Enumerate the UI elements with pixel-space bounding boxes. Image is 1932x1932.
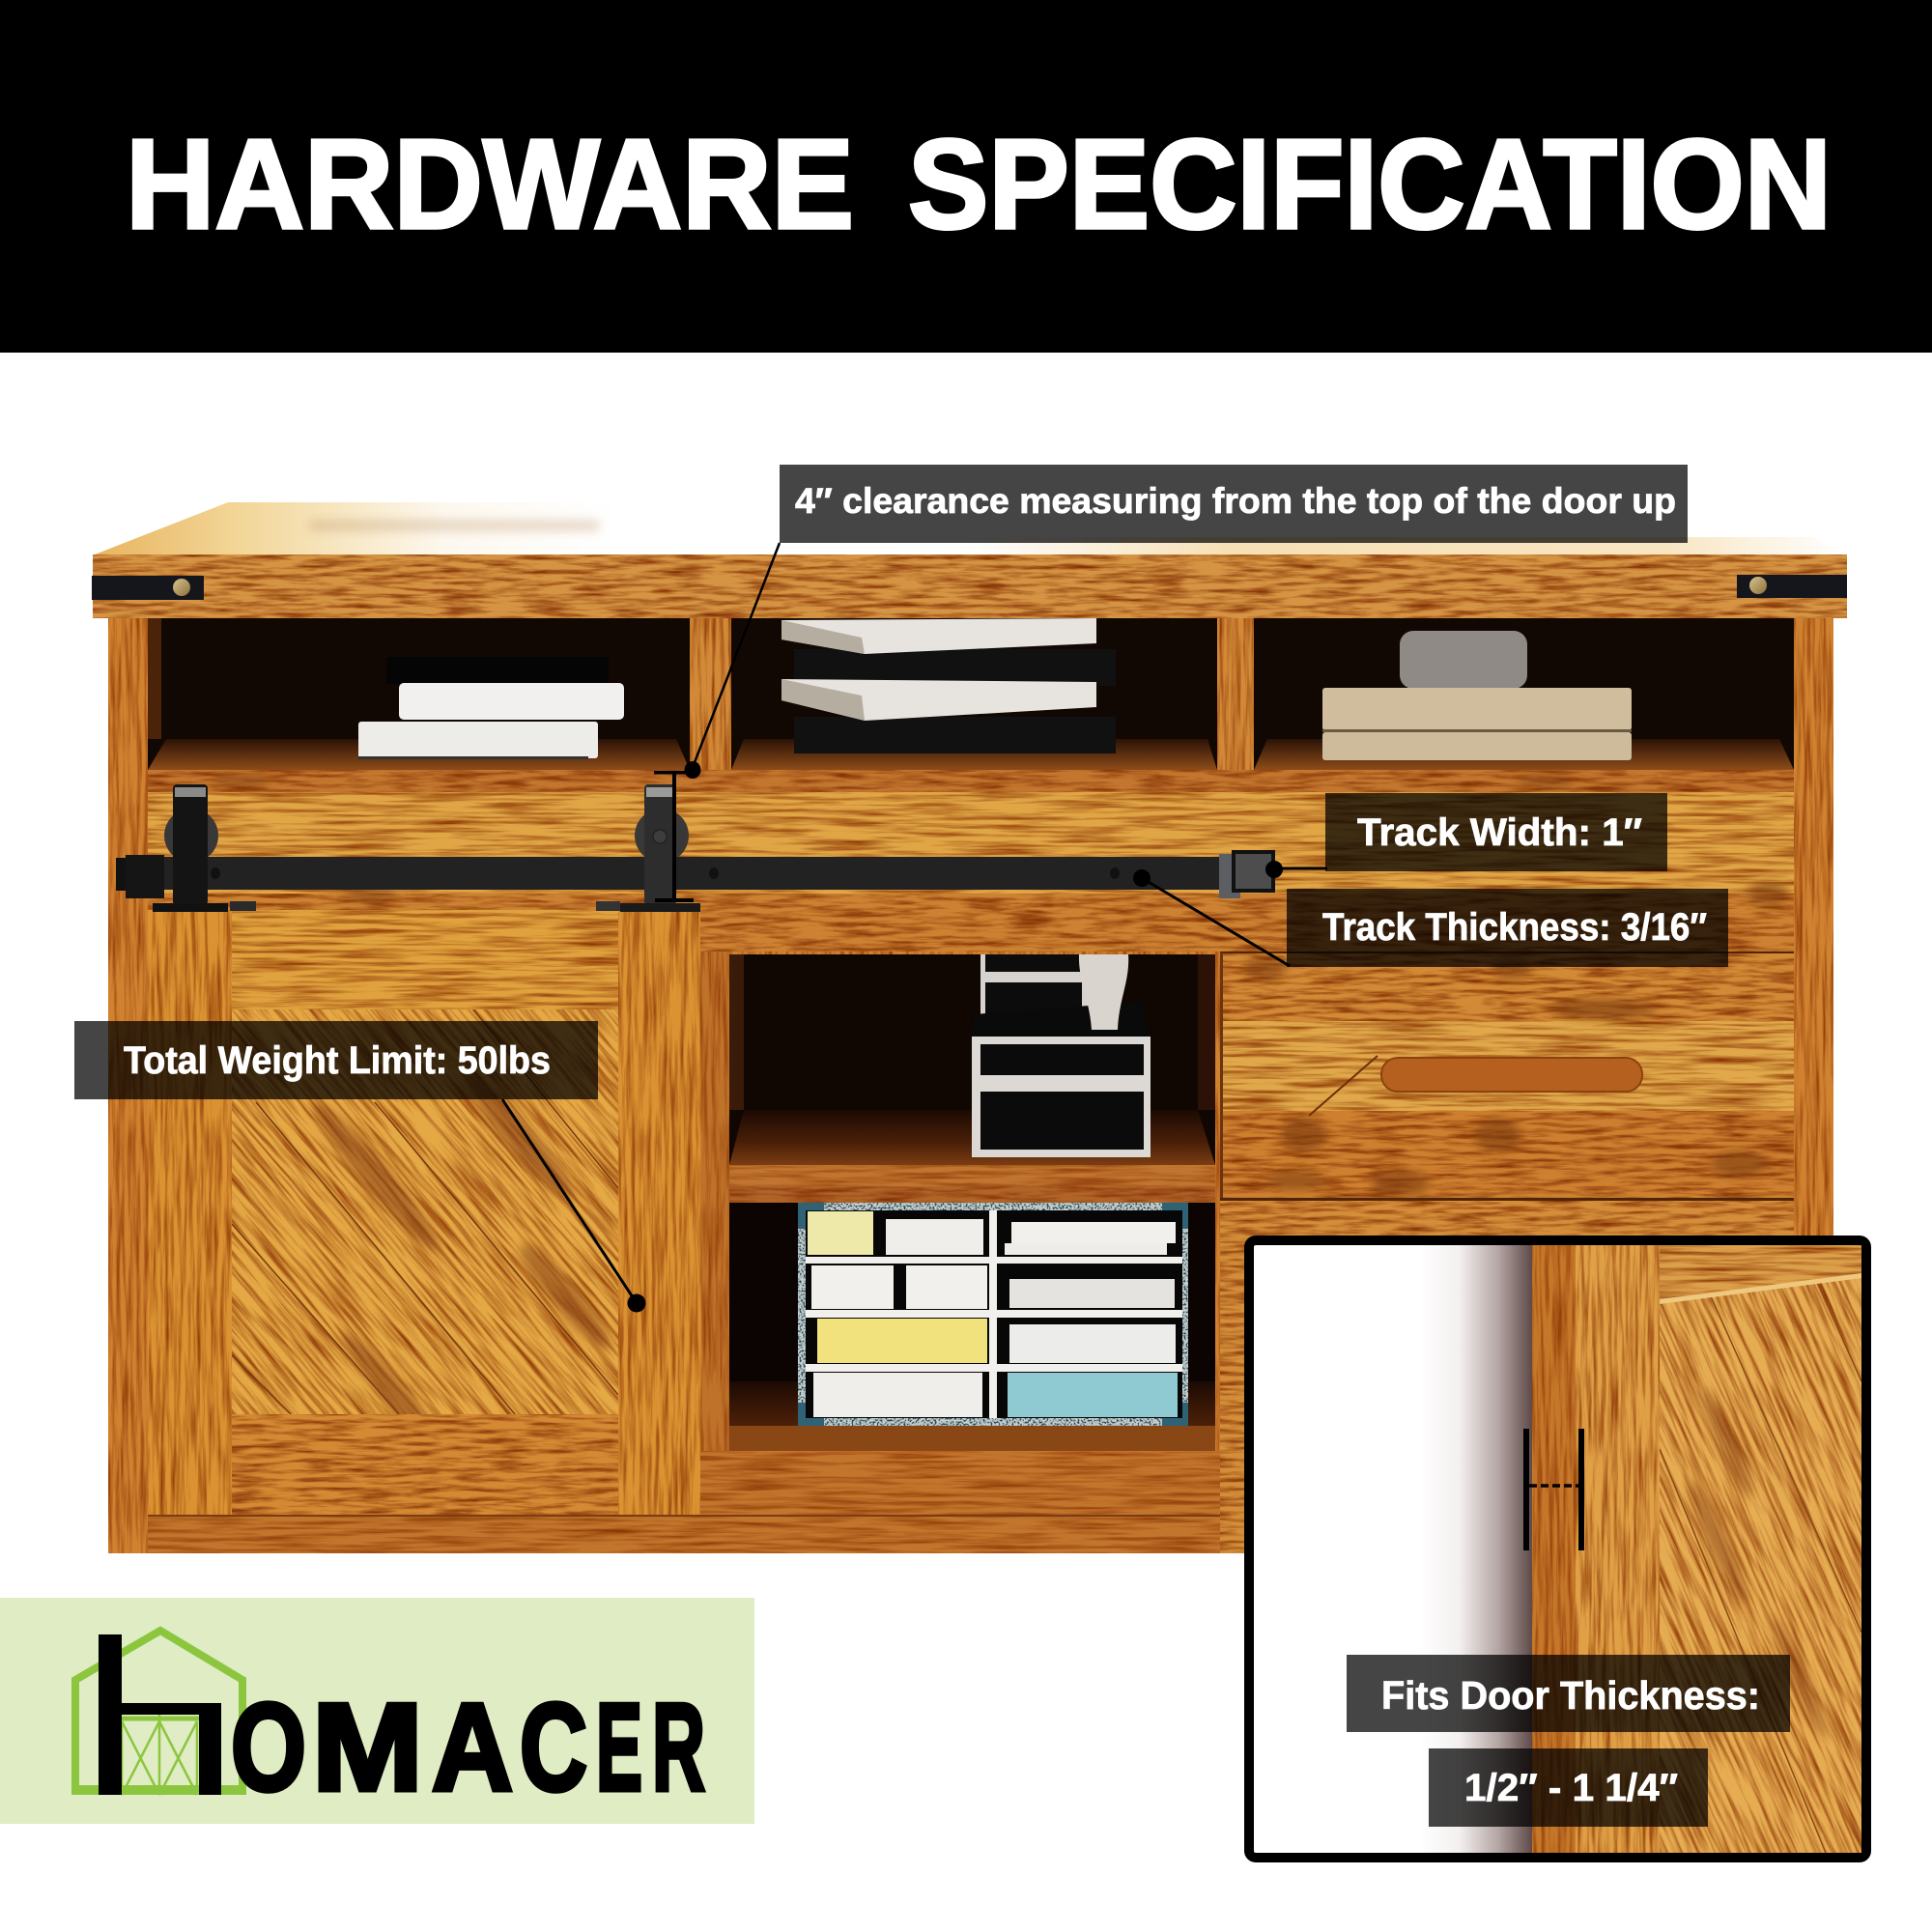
inset: door thickness detail — [1244, 1236, 1871, 1862]
centre stile — [701, 952, 729, 1451]
callout: track thickness — [1133, 869, 1728, 967]
wordmark: O — [231, 1678, 306, 1817]
door top rail — [231, 910, 619, 1009]
letter h — [99, 1634, 221, 1795]
right stopper — [1219, 852, 1273, 898]
thickness marker — [1523, 1429, 1584, 1550]
vase — [1400, 631, 1527, 689]
book stack — [781, 618, 1116, 753]
upper left shelf — [148, 618, 690, 770]
drawer pull — [1381, 1058, 1642, 1092]
header band — [0, 0, 1932, 353]
house outline — [71, 1631, 246, 1795]
callout: clearance: 4″ clearance measuring from the top of the door up — [795, 481, 1676, 521]
callout: weight limit: Total Weight Limit: 50lbs — [124, 1039, 551, 1082]
callout: track width: Track Width: 1″ — [1357, 811, 1642, 854]
left hanger — [153, 784, 256, 912]
callout: weight limit — [74, 1021, 645, 1312]
white vase — [1079, 954, 1128, 1030]
wordmark: M — [312, 1678, 423, 1817]
label: fits door thickness — [1347, 1655, 1790, 1732]
upper right shelf — [1254, 618, 1794, 770]
wordmark: R — [652, 1678, 705, 1817]
wordmark: C — [520, 1678, 587, 1817]
door bottom rail — [231, 1414, 619, 1515]
organizer shelves — [806, 1210, 1182, 1418]
scratch — [1309, 1056, 1378, 1116]
right strap — [1737, 575, 1847, 598]
label: thickness range — [1429, 1748, 1708, 1827]
top band — [93, 554, 1847, 618]
title: HARDWARE — [126, 113, 854, 255]
wordmark: A — [432, 1678, 513, 1817]
brand logo — [0, 1598, 754, 1824]
door diagonal panel — [232, 1009, 618, 1414]
callout: track thickness: Track Thickness: 3/16″ — [1322, 906, 1707, 949]
sliding door — [0, 777, 861, 1648]
centre lower bay — [729, 1203, 1215, 1451]
paper organizer — [798, 1203, 1188, 1426]
organizer papers — [808, 1211, 1178, 1417]
cross rail — [148, 770, 1794, 952]
callout: clearance — [654, 465, 1688, 902]
label: fits door thickness: Fits Door Thickness: — [1381, 1673, 1760, 1718]
inset diagonal planks — [1660, 1278, 1861, 1853]
large box — [972, 1002, 1151, 1157]
left stopper — [116, 855, 164, 898]
shelf dividers — [690, 618, 1254, 770]
cabinet top surface — [95, 502, 1846, 554]
track — [145, 857, 1256, 890]
track bolts — [211, 867, 1120, 879]
callout: track width — [1265, 793, 1667, 878]
inset frame — [1249, 1240, 1866, 1858]
lower right drawer — [1220, 1201, 1794, 1553]
books — [358, 657, 624, 759]
inset wood — [1440, 1245, 1861, 1853]
rear wheels — [164, 809, 689, 863]
right drawer — [1220, 952, 1794, 1201]
beige books — [1322, 688, 1632, 760]
barn door — [115, 1714, 203, 1795]
upper middle shelf — [731, 618, 1217, 770]
title: SPECIFICATION — [908, 113, 1832, 255]
door right stile — [618, 910, 700, 1515]
left strap — [92, 576, 204, 600]
track hardware — [116, 784, 1273, 912]
wordmark — [231, 1678, 705, 1817]
wordmark: E — [596, 1678, 642, 1817]
centre shelf — [729, 1165, 1215, 1203]
cabinet carcass — [108, 614, 1833, 1553]
right hanger — [596, 784, 700, 912]
clearance measure — [654, 771, 694, 902]
title — [126, 113, 1832, 255]
small box — [980, 954, 1088, 1024]
wood knots — [213, 775, 1789, 1197]
door left stile — [148, 910, 232, 1515]
cabinet illustration — [0, 465, 1847, 1648]
label: thickness range: 1/2″ - 1 1/4″ — [1464, 1767, 1678, 1809]
centre upper bay — [729, 954, 1215, 1165]
